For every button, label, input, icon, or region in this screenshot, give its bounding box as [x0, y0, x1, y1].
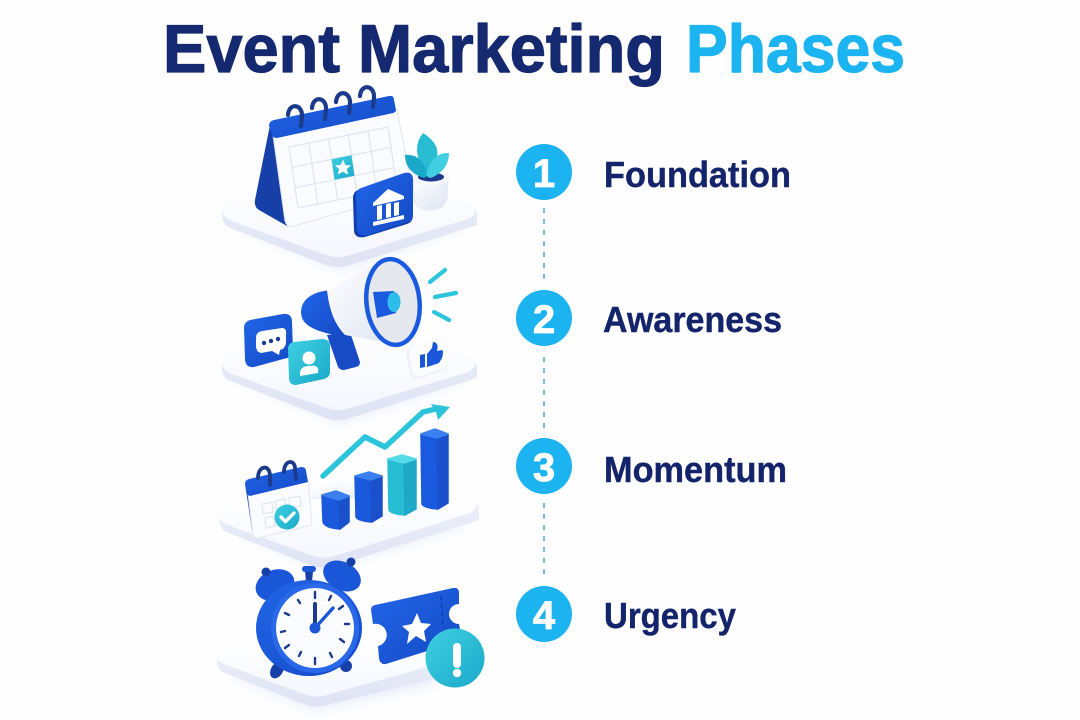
alert badge	[426, 628, 484, 688]
step 2: Awareness: Awareness	[603, 299, 782, 340]
plant	[405, 133, 449, 210]
person badge	[288, 339, 330, 385]
step 1: Foundation: 1	[533, 152, 555, 196]
bar 4	[421, 429, 448, 509]
trend arrow	[323, 404, 450, 476]
like badge	[406, 338, 447, 379]
platform 2	[222, 321, 477, 420]
illustration: urgency clock scene	[217, 554, 484, 709]
step 4: Urgency: 4	[533, 594, 556, 638]
platform 4	[217, 640, 470, 706]
highlighted star cell	[332, 155, 354, 180]
calendar grid	[289, 127, 397, 208]
megaphone rim	[362, 256, 424, 348]
megaphone handle	[327, 332, 360, 370]
clock face	[271, 583, 359, 673]
clock feet	[267, 659, 352, 681]
bar 1	[322, 491, 349, 529]
illustration: awareness megaphone scene	[222, 256, 477, 421]
megaphone cone	[327, 259, 400, 345]
calendar page	[273, 110, 413, 226]
connector: 3 to 4	[543, 503, 545, 577]
step 3: Momentum	[516, 438, 787, 494]
step 3: Momentum: 3	[533, 446, 555, 490]
step 2: Awareness	[516, 290, 782, 346]
calendar stand	[255, 125, 287, 226]
illustration: momentum chart scene	[218, 404, 479, 568]
step 1: Foundation: Foundation	[604, 154, 791, 195]
illustration: foundation calendar scene	[222, 87, 477, 268]
clock bells	[251, 554, 366, 606]
megaphone back	[301, 290, 345, 337]
title: Event Marketing	[163, 11, 665, 87]
chat badge	[244, 314, 293, 367]
platform 1	[222, 168, 477, 267]
bar 3	[388, 455, 416, 515]
connector: 2 to 3	[543, 357, 545, 431]
step 4: Urgency: Urgency	[604, 595, 736, 636]
title: Phases	[686, 11, 905, 87]
megaphone tube	[373, 291, 400, 318]
step 4: Urgency	[516, 586, 736, 642]
calendar header	[269, 96, 396, 138]
step 3: Momentum: Momentum	[604, 449, 787, 490]
bar 2	[355, 472, 382, 522]
calendar rings	[288, 87, 374, 126]
bank badge	[353, 173, 413, 237]
small calendar	[245, 462, 312, 538]
connector: 1 to 2	[543, 208, 545, 282]
platform 3	[218, 497, 479, 568]
ticket	[371, 588, 462, 664]
clock body	[256, 580, 362, 676]
sound rays	[430, 270, 456, 320]
step 2: Awareness: 2	[533, 298, 555, 342]
step 1: Foundation	[516, 144, 791, 200]
